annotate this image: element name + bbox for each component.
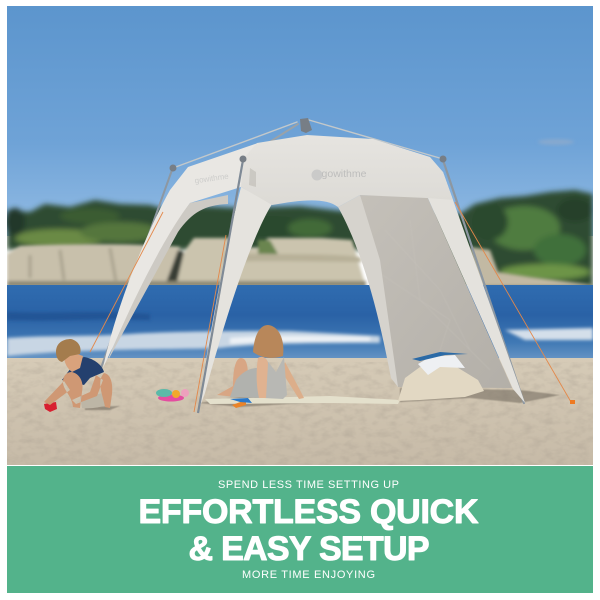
- centre front leg panel: [198, 187, 272, 412]
- girl tank top: [264, 357, 287, 399]
- beach photo: [5, 6, 593, 465]
- bottom line: more time enjoying: MORE TIME ENJOYING: [242, 569, 375, 581]
- boy legs and arms: [44, 372, 112, 408]
- pole joints: [170, 118, 446, 172]
- side panel of wall: [338, 195, 398, 387]
- heading line 2: & EASY SETUP: [188, 530, 430, 568]
- girl hair: [253, 325, 283, 358]
- girl right arm: [284, 362, 304, 399]
- boy shorts: [80, 393, 108, 408]
- green banner: [7, 466, 593, 593]
- blue frisbee paddle: [412, 352, 468, 361]
- tote bag: [398, 352, 484, 401]
- right leg panel: [427, 172, 525, 403]
- boy hair: [56, 339, 81, 362]
- banner background: [7, 466, 593, 593]
- yellow toy: [172, 390, 180, 398]
- towels: [418, 355, 465, 375]
- tent: [90, 118, 575, 413]
- left arch shaded lining: [106, 195, 228, 364]
- tent frame: poles and roof struts: [101, 120, 524, 403]
- sand texture: [7, 362, 593, 465]
- left leg panel: [103, 143, 258, 368]
- front pole: [198, 160, 243, 413]
- left canopy logo: gowithme: [194, 172, 230, 185]
- logo wordmark: gowithme: [322, 168, 367, 180]
- red bucket: [44, 402, 57, 412]
- canopy crease shadow: [249, 168, 256, 187]
- pink toy: [181, 389, 189, 397]
- teal toy: [156, 389, 172, 397]
- orange guy ropes: [90, 202, 571, 412]
- tree line: [5, 190, 593, 290]
- boy blue shirt: [62, 357, 104, 385]
- canopy logo: [312, 170, 366, 180]
- cliffs: [7, 238, 593, 291]
- main heading: [138, 493, 479, 568]
- boy face: [64, 352, 83, 372]
- bag body: [398, 366, 484, 401]
- girl legs: [217, 358, 248, 397]
- boy crouching: [44, 339, 112, 408]
- distant cloud: [538, 139, 574, 145]
- top line: spend less time setting up: SPEND LESS TIME SETTING UP: [218, 479, 399, 491]
- heading line 1: EFFORTLESS QUICK: [138, 493, 479, 531]
- girl left arm: [257, 357, 268, 398]
- toys: [44, 389, 252, 412]
- logo sun icon: [312, 170, 322, 180]
- waves: [7, 312, 593, 356]
- girl striped dress: [230, 368, 259, 398]
- wall crease lines: [375, 220, 490, 380]
- picnic blanket: [205, 396, 400, 404]
- sea: [7, 285, 593, 361]
- pink ring toy: [158, 394, 184, 402]
- sand: [7, 358, 593, 465]
- shadows on sand: [85, 388, 560, 410]
- stake marker: [570, 400, 575, 404]
- sky: [7, 6, 593, 236]
- girl sitting: [217, 325, 304, 399]
- canopy roof: [241, 135, 453, 207]
- back wall panel: [360, 195, 512, 388]
- orange toy: [232, 400, 246, 408]
